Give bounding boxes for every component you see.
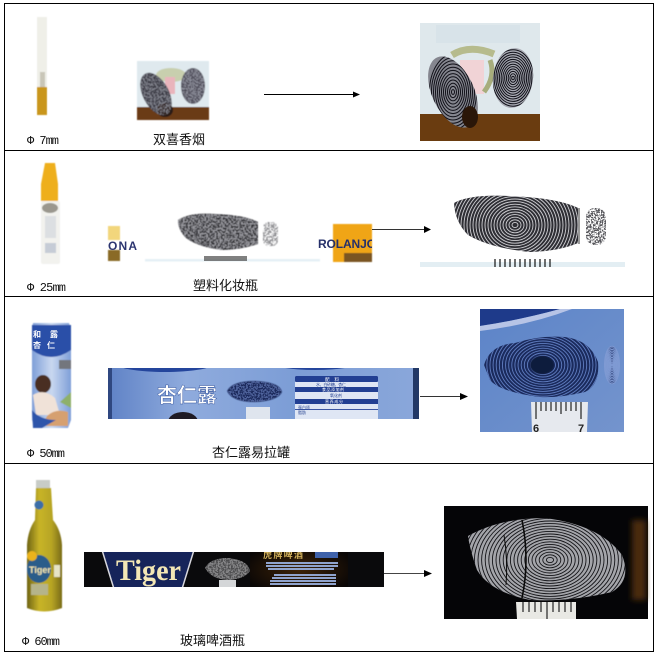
icon: cigarette bbox=[37, 17, 47, 115]
nutrition table: 水、白砂糖、杏仁 bbox=[316, 381, 346, 387]
nutrition table: 配 料 bbox=[325, 376, 340, 383]
icon: drink can bbox=[32, 323, 71, 428]
text on can: 和露 bbox=[33, 329, 58, 339]
nutrition table: 氧化剂 bbox=[330, 392, 342, 398]
caption: can name: 杏仁露易拉罐 bbox=[212, 445, 290, 460]
image: beer bottle enlarged fingerprint bbox=[444, 498, 648, 622]
icon: beer bottle: Tiger bbox=[29, 565, 51, 575]
caption: diameter 60mm: Φ 60mm bbox=[22, 635, 60, 649]
panel: cosmetic bottle row bbox=[4, 150, 654, 296]
arrow: can label to enlargement bbox=[420, 393, 468, 400]
image: beer label strip with small fingerprint: Tiger bbox=[116, 554, 181, 587]
caption: cosmetic bottle name: 塑料化妆瓶 bbox=[193, 278, 258, 293]
image: cigarette pack small fingerprint bbox=[134, 61, 209, 120]
image: can label strip with small fingerprint bbox=[108, 368, 419, 419]
image: can enlarged fingerprint: 6 bbox=[533, 423, 539, 435]
text on can bbox=[33, 329, 58, 350]
image: beer label strip with small fingerprint bbox=[84, 552, 384, 587]
caption: beer bottle name: 玻璃啤酒瓶 bbox=[180, 633, 245, 648]
image: cosmetic bottle enlarged fingerprint bbox=[420, 196, 625, 267]
caption: cigarette name: 双喜香烟 bbox=[153, 132, 205, 147]
image: cosmetic bottle small fingerprint bbox=[108, 214, 376, 262]
image: beer label strip with small fingerprint: 虎牌啤酒 bbox=[263, 549, 303, 560]
image: cosmetic bottle small fingerprint: ROLANJO bbox=[318, 237, 376, 251]
nutrition table: 蛋白质 bbox=[298, 404, 310, 410]
image: cigarette pack enlarged fingerprint bbox=[418, 23, 540, 141]
caption: diameter 7mm: Φ 7mm bbox=[27, 134, 59, 148]
image: can label strip with small fingerprint: 杏仁露 bbox=[157, 379, 217, 408]
nutrition table: 营养成分 bbox=[325, 398, 343, 404]
caption: diameter 25mm: Φ 25mm bbox=[27, 281, 66, 295]
arrow: bottle to enlargement bbox=[372, 226, 431, 233]
image: can enlarged fingerprint: 7 bbox=[578, 423, 584, 435]
image: can enlarged fingerprint bbox=[480, 309, 624, 432]
panel: almond drink can row bbox=[4, 296, 654, 464]
icon: beer bottle bbox=[27, 480, 62, 612]
nutrition table: 脂肪 bbox=[298, 409, 306, 415]
panel: glass beer bottle row bbox=[4, 464, 654, 652]
icon: cosmetic spray bottle bbox=[41, 163, 60, 264]
nutrition table bbox=[295, 376, 378, 419]
text on can: 杏仁 bbox=[33, 340, 55, 350]
caption: diameter 50mm: Φ 50mm bbox=[27, 447, 65, 461]
panel: cigarette row bbox=[4, 4, 654, 150]
arrow: beer label to enlargement bbox=[384, 570, 432, 577]
arrow: pack to enlargement bbox=[264, 92, 360, 98]
nutrition table: 食品添加剂 bbox=[322, 386, 344, 392]
image: cosmetic bottle small fingerprint: ONA bbox=[108, 239, 137, 253]
